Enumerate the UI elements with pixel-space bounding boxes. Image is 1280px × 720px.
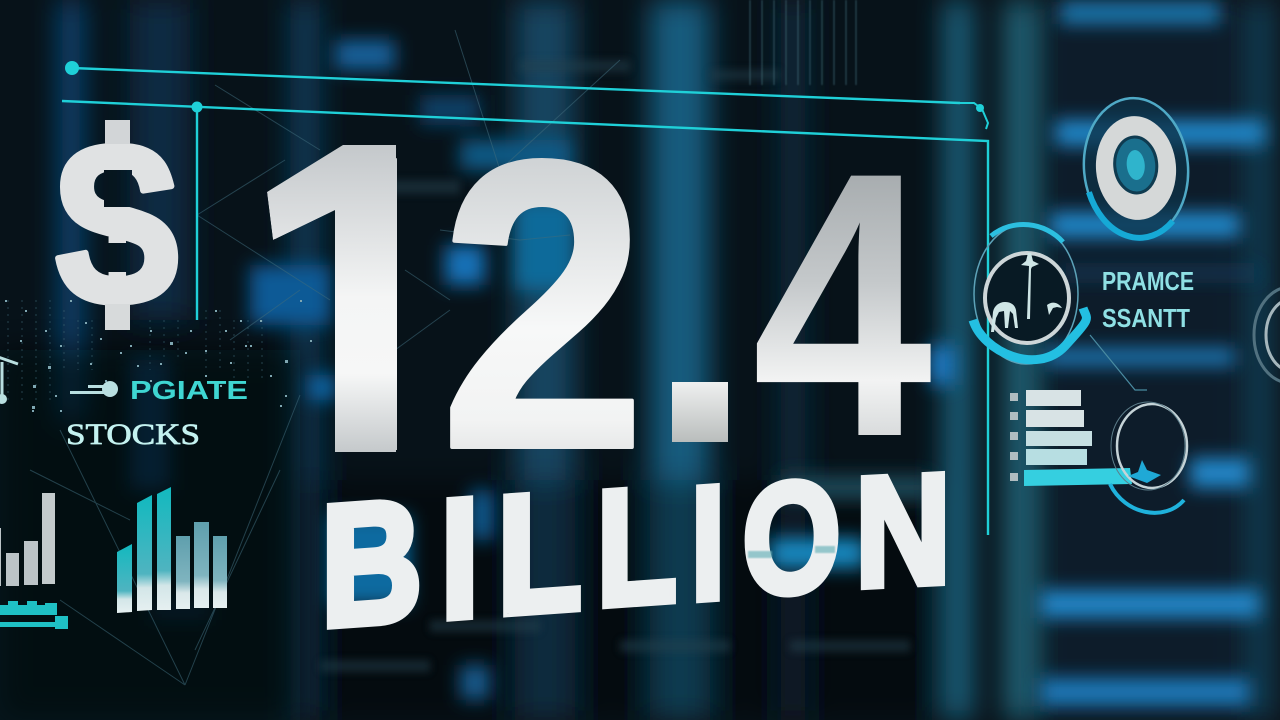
label: STOCKS: STOCKS	[66, 418, 200, 451]
glitch band across the O	[748, 546, 835, 558]
spike glyph	[991, 253, 1062, 332]
dollar sign: $	[55, 93, 179, 355]
digit 2: 2	[439, 76, 647, 535]
label: pramice ssantt: PRAMCE	[1102, 266, 1194, 296]
icon: cropped ring at right edge	[1254, 287, 1280, 383]
word: BILLION: I	[691, 453, 725, 635]
icon: top right ring badge	[1078, 93, 1194, 243]
label: pramice ssantt	[1102, 266, 1194, 333]
connector line	[1090, 335, 1147, 390]
word: BILLION: I	[441, 462, 479, 654]
digit 1: 1	[246, 66, 482, 540]
icon: lower ring gauge	[1110, 402, 1187, 513]
label: PGIATE: PGIATE	[130, 375, 248, 405]
cropped node icon	[0, 357, 18, 404]
bar chart: teal gradient	[117, 487, 227, 613]
bar chart: left cropped grey	[0, 493, 68, 629]
word: BILLION: B	[321, 464, 422, 663]
digit 4: 4	[752, 94, 934, 515]
word: BILLION: N	[855, 440, 951, 620]
digit 1	[267, 145, 397, 452]
label: pramice ssantt: SSANTT	[1102, 303, 1190, 333]
decimal point	[672, 382, 728, 442]
key icon	[70, 381, 118, 397]
network lines	[30, 30, 620, 685]
word: BILLION: O	[743, 447, 841, 629]
list bars	[1010, 390, 1132, 486]
left label: private stocks	[0, 357, 248, 451]
word: BILLION: L	[597, 453, 677, 641]
word: BILLION: L	[497, 456, 582, 650]
icon: middle badge with spikes	[973, 224, 1086, 364]
word: BILLION	[321, 440, 951, 663]
cyan frame lines	[62, 61, 988, 535]
data sparkle dots	[5, 300, 312, 412]
big figure: 12.4	[267, 145, 931, 452]
